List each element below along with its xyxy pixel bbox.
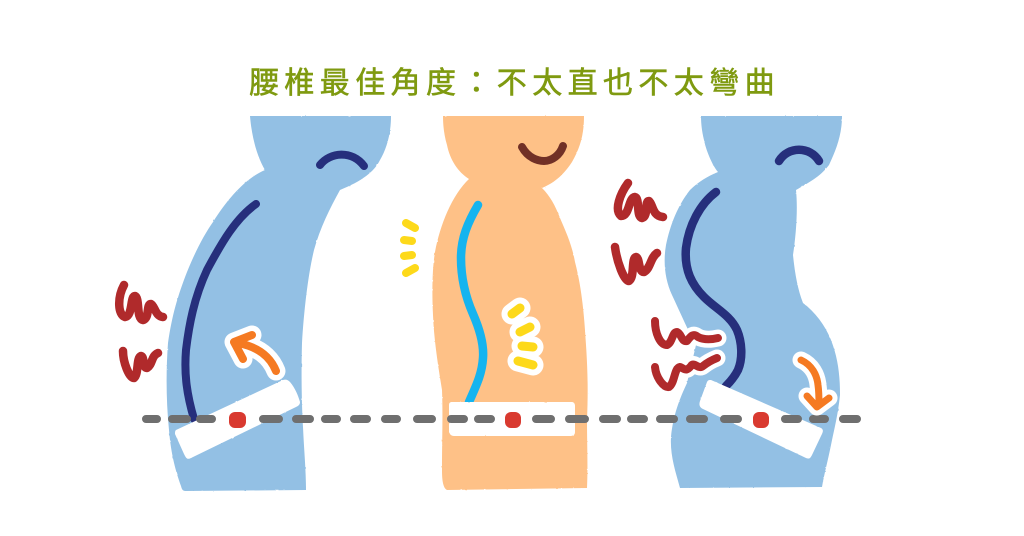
pain squiggles: right lower, white halo [655,321,718,387]
spine: right [686,192,741,386]
pivot dot: right [753,412,769,428]
pelvis: middle [449,402,575,436]
pain squiggles: left [119,285,163,378]
pelvis: right tilted [699,380,823,459]
figure: left, bent posture [119,116,397,491]
horizontal dashed line: middle [417,415,585,423]
mouth: right frown [779,150,819,161]
body: right blue [665,116,842,488]
pain squiggles: right upper [615,183,663,281]
horizontal dashed line: left [146,415,397,423]
arrow: right orange down [801,360,829,407]
ok marks: middle outer yellow [404,223,415,273]
body: middle orange [432,116,588,490]
ok marks: middle inner yellow [512,308,533,365]
mouth: middle smile [522,146,563,161]
body: left blue [167,116,391,491]
pivot dot: middle [505,412,521,428]
pivot dot: left [229,412,246,428]
mouth: left frown [320,155,364,166]
pelvis: left tilted [175,380,300,459]
arrow: left orange up [234,335,276,371]
figure: middle, ideal posture [404,116,588,490]
spine: left [185,204,256,419]
title: 腰椎最佳角度：不太直也不太彎曲 [249,67,780,100]
spine: middle [461,205,483,402]
figure: right, arched posture [603,116,857,488]
horizontal dashed line: right [603,415,857,423]
